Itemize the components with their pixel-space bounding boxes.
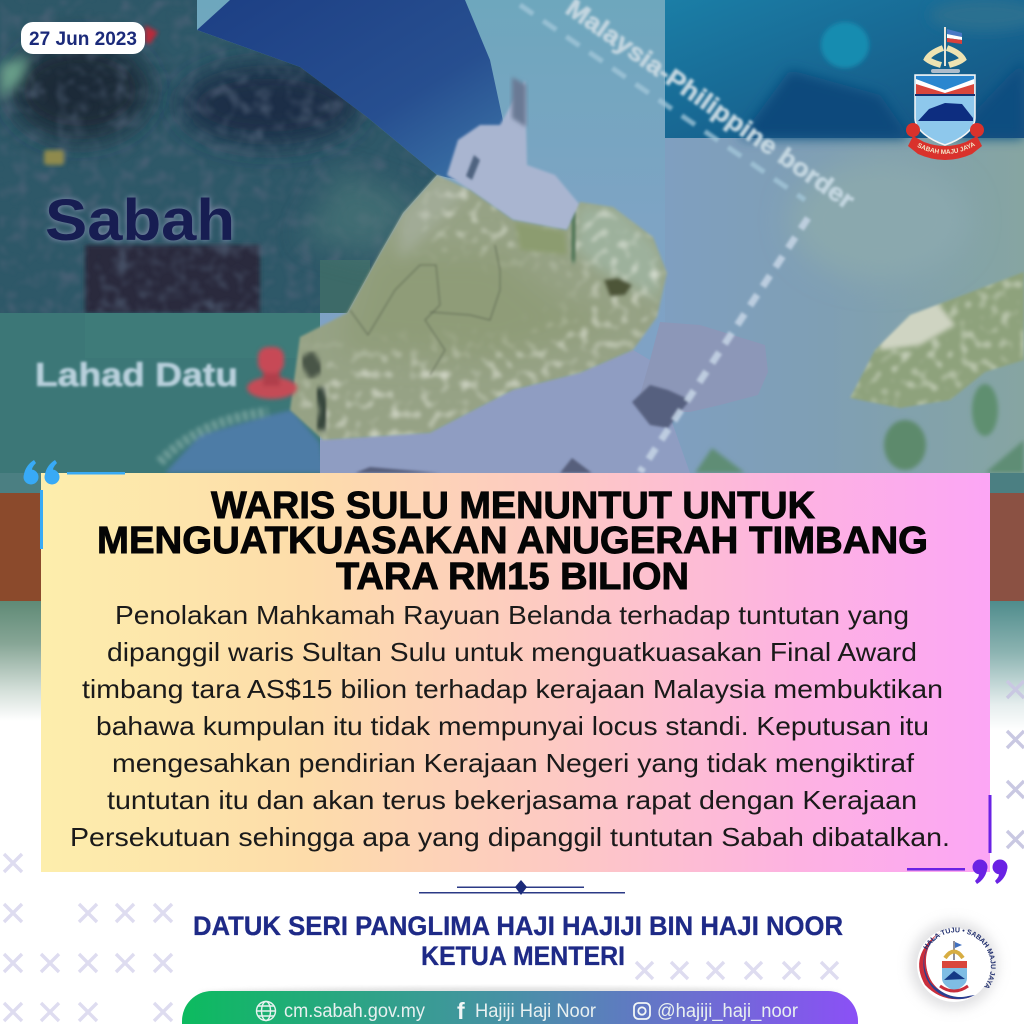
ribbon: SABAH MAJU JAYA [918, 142, 976, 154]
wreath [931, 69, 960, 73]
reef [821, 22, 869, 68]
website: cm.sabah.gov.my [284, 1001, 425, 1022]
seal badge [907, 918, 1001, 1012]
panel background [41, 473, 990, 872]
instagram handle: @hajiji_haji_noor [657, 1001, 799, 1022]
map label: Malaysia-Philippine border: Malaysia-Philippine border [561, 0, 859, 215]
shield [915, 75, 975, 145]
headline: MENGUATKUASAKAN ANUGERAH TIMBANG [97, 520, 928, 562]
body text: Penolakan Mahkamah Rayuan Belanda terhadap tuntutan yang [115, 600, 909, 630]
seal badge: HALA TUJU • SABAH MAJU JAYA [923, 928, 996, 988]
grey sea right [665, 138, 1024, 493]
background map photo [0, 0, 1024, 731]
hands [927, 48, 963, 65]
olive main land [288, 174, 668, 441]
cloud haze [790, 160, 970, 280]
bright corner land [0, 55, 30, 100]
closing quote mark and lines [907, 795, 1008, 884]
dashed border line [520, 5, 808, 472]
bay [165, 410, 325, 473]
deep water top right [665, 0, 1024, 138]
dark blob [632, 385, 690, 428]
body text: bahawa kumpulan itu tidak mempunyai locus standi. Keputusan itu [96, 711, 929, 741]
icon: globe [256, 1002, 276, 1020]
grey island north [447, 80, 580, 230]
red corner mark [145, 25, 158, 44]
headline [97, 485, 928, 598]
date badge [21, 22, 145, 54]
facebook name: Hajiji Haji Noor [475, 1001, 597, 1022]
flag [945, 27, 962, 66]
deep ocean centre [197, 0, 505, 190]
body text: tuntutan itu dan akan terus bekerjasama rapat dengan Kerajaan [107, 785, 917, 815]
bands [0, 473, 1024, 493]
icon: facebook: f [457, 998, 465, 1024]
headline: TARA RM15 BILION [336, 556, 689, 598]
body text [70, 600, 950, 852]
teal lower left land [0, 313, 320, 493]
divider ornament [419, 880, 625, 895]
map label: Lahad Datu: Lahad Datu [35, 356, 238, 393]
opening quote mark and lines [24, 460, 125, 549]
right island [840, 270, 1024, 410]
white bottom backdrop [0, 872, 1024, 1024]
contact bar [182, 987, 858, 1024]
icon: Sabah crest [906, 27, 984, 160]
headline: WARIS SULU MENUNTUT UNTUK [211, 485, 816, 527]
map pin [247, 347, 297, 399]
icon: instagram [634, 1003, 650, 1019]
body text: Persekutuan sehingga apa yang dipanggil tuntutan Sabah dibatalkan. [70, 822, 950, 852]
cross pattern [4, 681, 1024, 1021]
map label: Sabah: Sabah [45, 188, 235, 253]
grey peninsula [640, 322, 768, 412]
dark forest land [0, 0, 437, 313]
lower grey land [320, 350, 690, 473]
name and title: KETUA MENTERI [421, 941, 625, 971]
body text: timbang tara AS$15 bilion terhadap kerajaan Malaysia membuktikan [82, 674, 943, 704]
small marker [44, 150, 64, 165]
name and title: DATUK SERI PANGLIMA HAJI HAJIJI BIN HAJI NOOR [193, 911, 843, 941]
south islands [884, 420, 926, 470]
body text: mengesahkan pendirian Kerajaan Negeri yang tidak mengiktiraf [112, 748, 915, 778]
body text: dipanggil waris Sultan Sulu untuk menguatkuasakan Final Award [107, 637, 917, 667]
name and title [193, 911, 843, 971]
map label: Sabah: Sabah [45, 188, 235, 253]
date badge: 27 Jun 2023 [29, 28, 137, 50]
panel: statement [41, 473, 990, 872]
